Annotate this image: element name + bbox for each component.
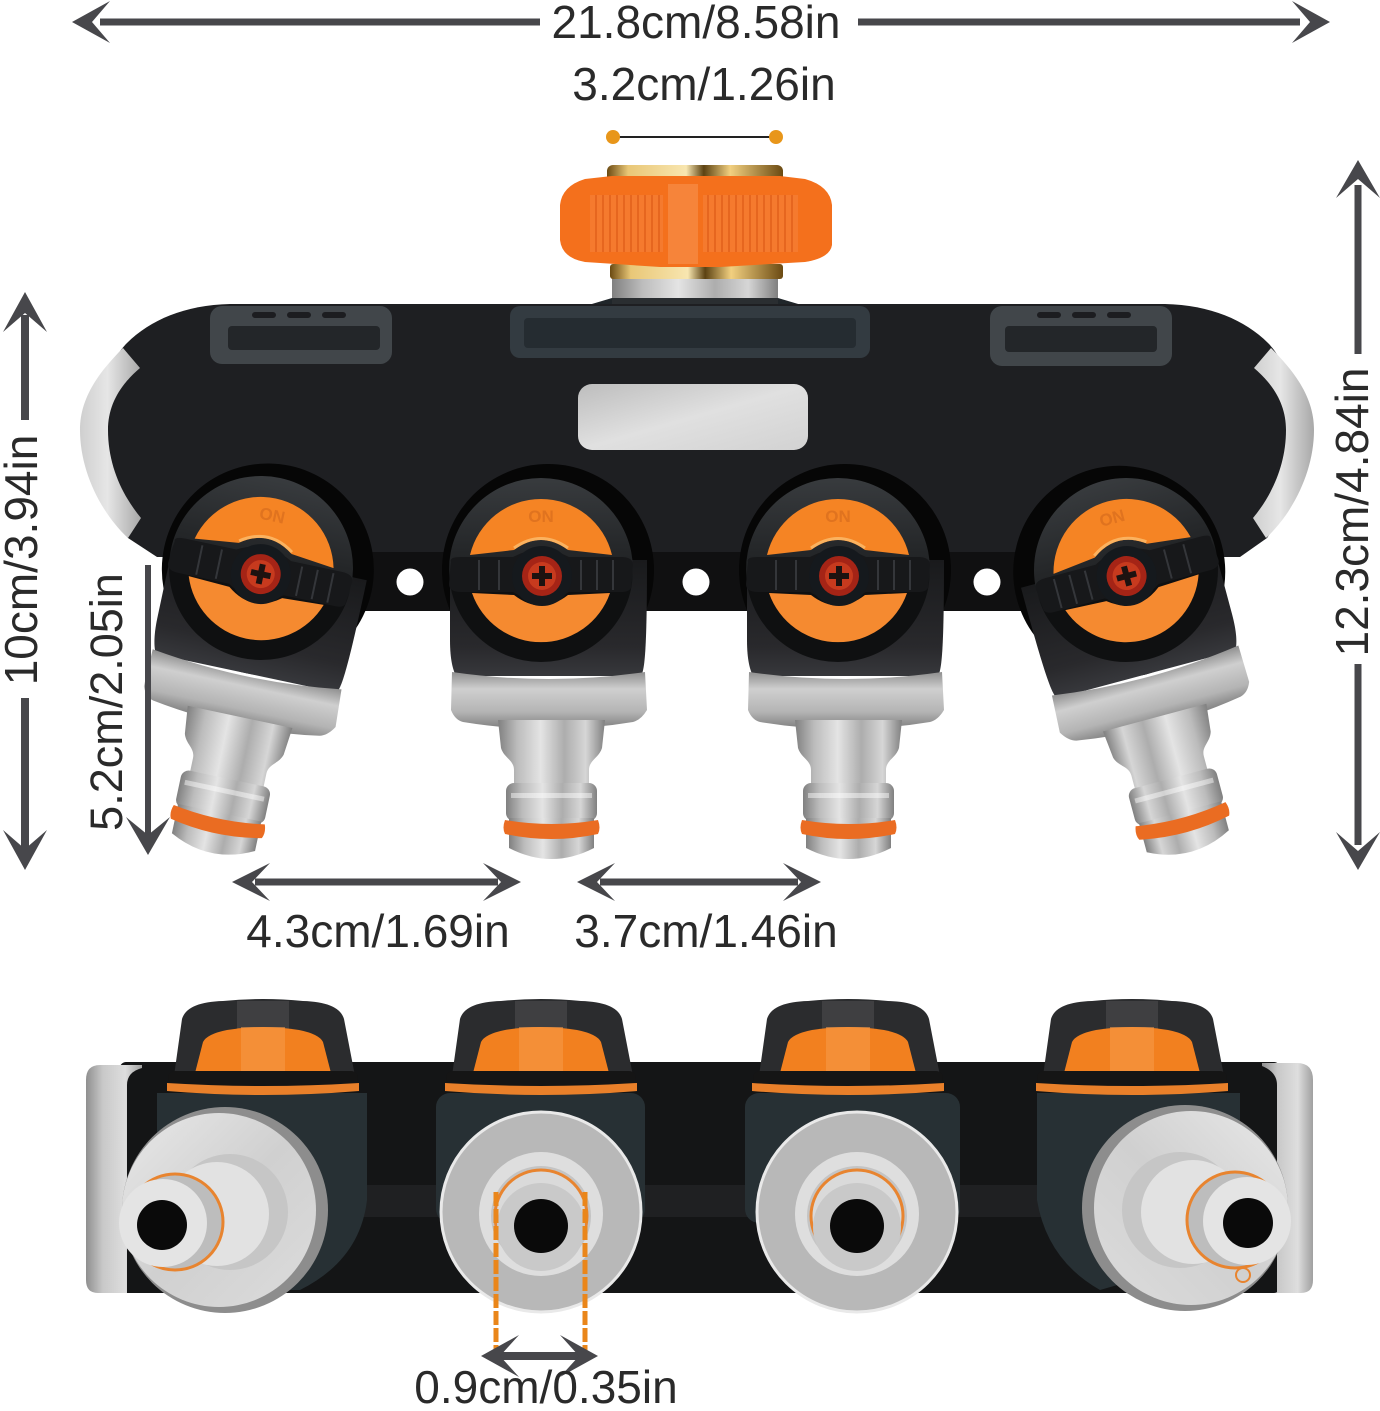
top view product: hose splitter bbox=[80, 165, 1314, 878]
left silver end cap bbox=[80, 348, 141, 538]
bottom view product: hose splitter from below bbox=[86, 999, 1313, 1313]
lower rail bbox=[350, 1185, 1070, 1217]
valve 3 bbox=[739, 464, 951, 859]
outlet 2 bbox=[441, 1112, 641, 1312]
mounting plate with holes bbox=[340, 552, 1060, 611]
outlet 1 bbox=[119, 1107, 328, 1313]
dimension: inner outlet spacing bbox=[574, 863, 838, 957]
dimension: outer outlet spacing bbox=[232, 863, 521, 957]
brass coupling bbox=[607, 165, 783, 279]
valve 4 bbox=[989, 442, 1296, 878]
outlet 3 bbox=[757, 1112, 957, 1312]
dimension: outlet length: 5.2cm/2.05in bbox=[81, 573, 132, 831]
dimension: overall height bbox=[1326, 160, 1380, 870]
main body bbox=[100, 304, 1294, 557]
grip panels bbox=[210, 306, 1172, 366]
dimension: body height bbox=[0, 292, 47, 870]
dimension: outlet bore bbox=[414, 1192, 678, 1411]
valve 1 bbox=[104, 444, 394, 874]
left silver end bbox=[86, 1065, 142, 1293]
outlet 4 bbox=[1082, 1105, 1291, 1311]
valve 1: ON bbox=[258, 504, 287, 528]
right silver end cap bbox=[1253, 348, 1314, 538]
valve knob 2 bbox=[445, 999, 637, 1095]
dimension: inlet diameter: 3.2cm/1.26in bbox=[572, 58, 836, 110]
valve 2: ON bbox=[528, 507, 554, 526]
inlet neck bbox=[565, 278, 825, 330]
dimension: outlet length bbox=[81, 565, 170, 855]
dimension: outer outlet spacing: 4.3cm/1.69in bbox=[246, 905, 510, 957]
dimension: overall width bbox=[72, 0, 1330, 48]
valve 2 bbox=[442, 464, 654, 859]
orange coupling nut bbox=[560, 176, 832, 267]
valve housings bbox=[157, 1093, 1240, 1290]
valve 3: ON bbox=[825, 507, 851, 526]
silver label plate bbox=[578, 384, 808, 450]
dimension: inner outlet spacing: 3.7cm/1.46in bbox=[574, 905, 838, 957]
valve knob 3 bbox=[752, 999, 944, 1095]
back bar bbox=[120, 1062, 1280, 1293]
dimension: overall height: 12.3cm/4.84in bbox=[1326, 368, 1378, 656]
valve knob 1 bbox=[167, 999, 359, 1095]
valve knob 4 bbox=[1036, 999, 1228, 1095]
dimension: inlet diameter bbox=[572, 58, 836, 144]
right silver end bbox=[1262, 1063, 1313, 1293]
valve 4: ON bbox=[1097, 506, 1127, 531]
